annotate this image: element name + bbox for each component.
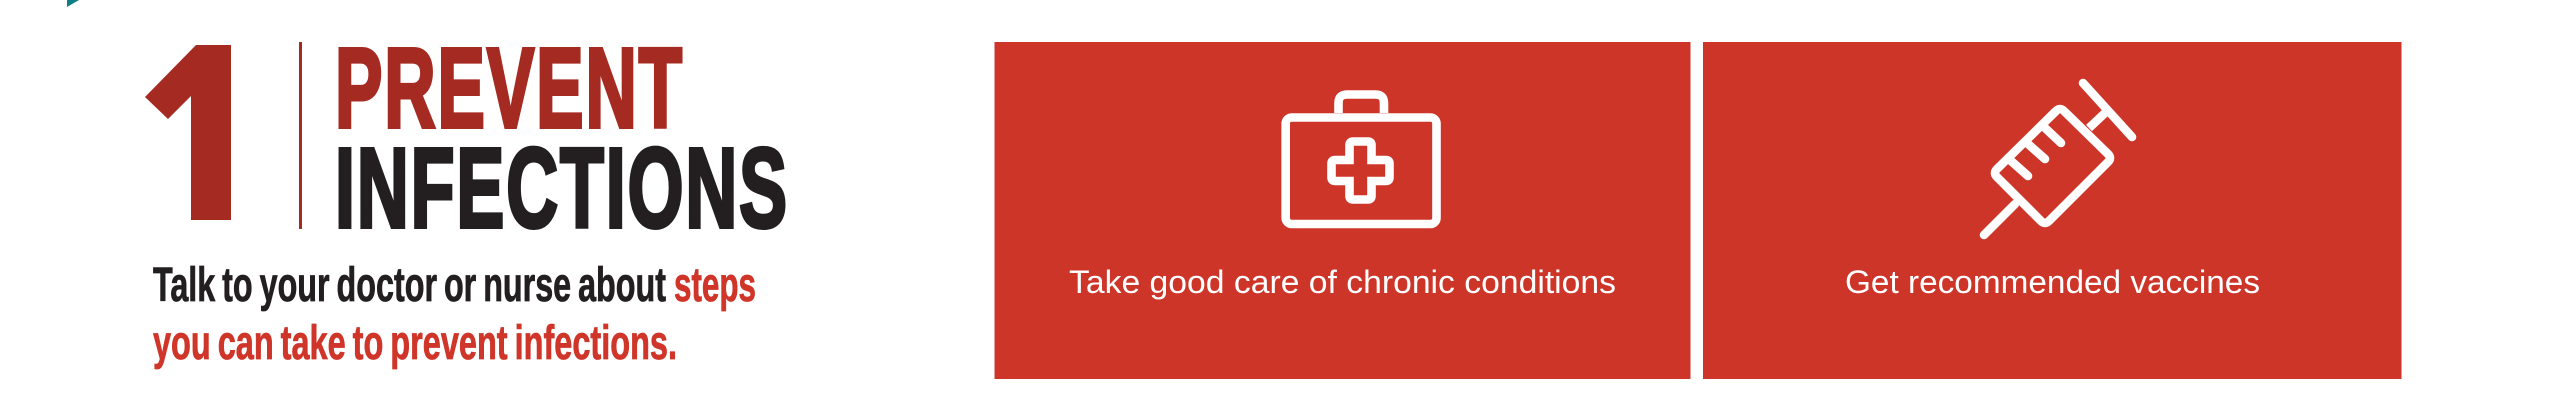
intro text: second line red: you can take to prevent infections. — [153, 317, 677, 370]
panel: chronic conditions — [994, 42, 1690, 379]
intro text — [153, 259, 756, 370]
panel label: Get recommended vaccines — [1845, 264, 2260, 300]
panel label: Take good care of chronic conditions — [1069, 264, 1616, 300]
panel background — [994, 42, 1690, 379]
vertical divider — [299, 42, 302, 229]
icon: teal corner fragment — [67, 0, 79, 7]
heading line: prevent: PREVENT — [335, 25, 684, 151]
icon: first aid kit — [1286, 94, 1436, 224]
heading line: infections: INFECTIONS — [335, 125, 789, 251]
heading: prevent infections — [335, 25, 789, 251]
step number 1 — [145, 45, 231, 220]
icon: syringe — [1984, 83, 2132, 235]
intro text: first line black: Talk to your doctor or nurse about — [153, 259, 666, 312]
panel: vaccines — [1703, 42, 2402, 379]
intro text: first line red: steps — [674, 259, 756, 312]
panel background — [1703, 42, 2402, 379]
